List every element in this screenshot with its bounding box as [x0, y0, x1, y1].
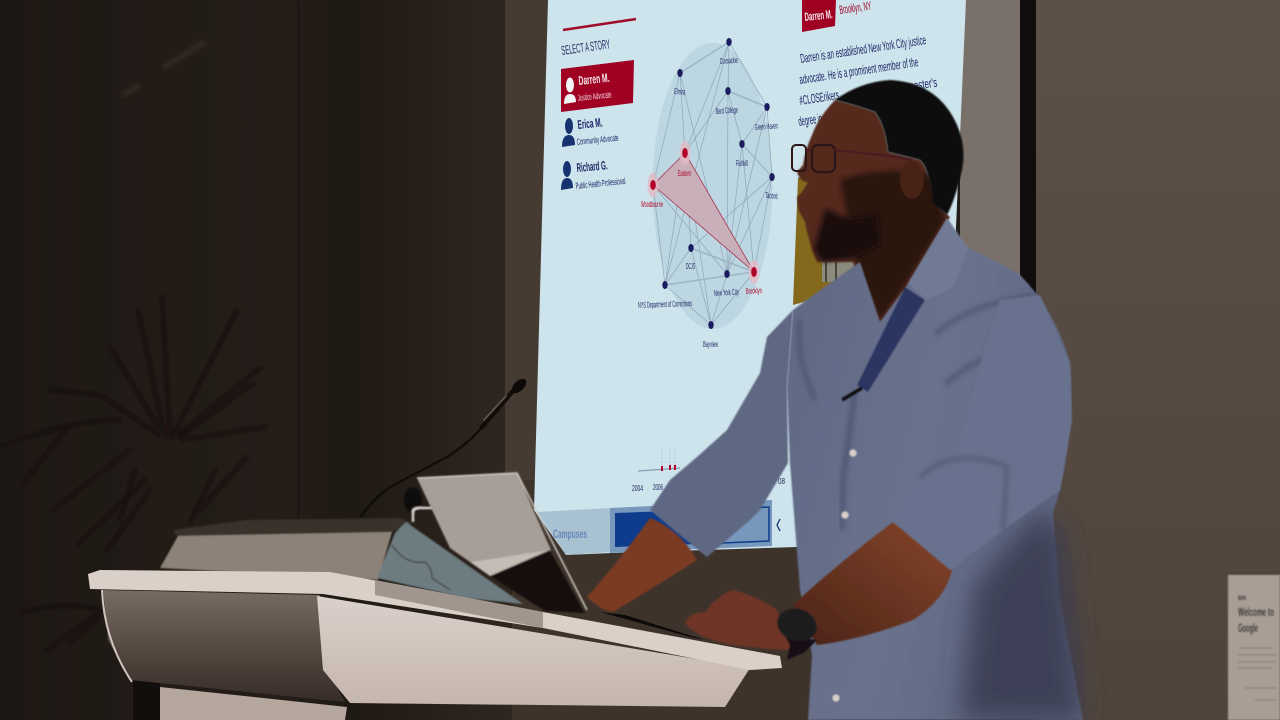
shirt placket [857, 287, 925, 392]
profile biography text [797, 32, 938, 129]
podium [88, 570, 782, 720]
profile photo [793, 165, 865, 305]
story: Darren M.: Darren M. [578, 71, 610, 88]
timeline [632, 450, 785, 493]
profile biography text: Darren is an established New York City justice [799, 32, 927, 66]
lapel microphone [842, 388, 862, 400]
timeline: 2006 [653, 482, 663, 492]
node labels: Bayview [703, 339, 718, 349]
story selector panel [560, 19, 636, 191]
podium dark side panel [103, 590, 345, 702]
node labels: DCJS [686, 261, 695, 271]
presentation screen: Green Haven [754, 120, 778, 132]
wall poster: Google [1238, 621, 1258, 635]
story: Erica M.: Community Advocate [576, 133, 619, 147]
shirt folds [799, 295, 1035, 400]
profile header: Darren M.: Darren M. [804, 7, 833, 24]
node labels: Coxsackie [719, 55, 738, 66]
ear [900, 161, 924, 199]
lower torso shadow [960, 510, 1083, 720]
bottom navigation bar: Campuses [553, 527, 587, 541]
profile biography text: advocate. He is a prominent member of the [798, 54, 919, 87]
story: Darren M. [561, 60, 634, 112]
node labels: New York City [714, 287, 739, 298]
node labels: Bard College [715, 104, 738, 116]
node labels [638, 55, 779, 349]
presentation screen: Taconic [765, 190, 779, 201]
profile biography text: degree in [797, 111, 823, 129]
face and neck [797, 100, 950, 330]
plant silhouette [0, 297, 265, 650]
presenter [587, 80, 1083, 720]
presentation screen [534, 0, 966, 555]
node labels: Brooklyn [746, 285, 762, 296]
podium white front panel [317, 596, 750, 707]
story: Erica M. [562, 115, 619, 147]
podium top edge [88, 570, 782, 670]
laptop on podium [404, 473, 587, 613]
shirt torso [787, 218, 1083, 720]
hand [685, 590, 793, 650]
face shadow [840, 171, 945, 320]
story: Darren M.: Justice Advocate [577, 89, 612, 103]
microphone [361, 376, 529, 516]
podium base [160, 687, 347, 720]
wall poster: BK [1238, 596, 1247, 602]
chevron icon [777, 519, 780, 531]
sleeve cuff fold [920, 458, 1007, 530]
monitor box on podium [160, 518, 523, 604]
node labels: NYS Department of Corrections [638, 298, 692, 310]
network diagram [638, 38, 779, 349]
timeline: 2004 [632, 483, 643, 493]
node labels: Eastern [678, 168, 691, 178]
bottom navigation bar [537, 499, 798, 555]
story: Erica M.: Erica M. [577, 115, 603, 132]
timeline: 08 [778, 476, 785, 486]
left rolled sleeve [650, 310, 793, 557]
wristwatch [773, 603, 821, 660]
collar [908, 218, 968, 300]
profile header: Darren M. [802, 0, 872, 32]
hair [835, 80, 964, 215]
left forearm [587, 518, 697, 612]
shirt buttons [832, 450, 856, 702]
tablet on podium edge [600, 612, 705, 640]
eyeglasses [792, 145, 912, 172]
node labels: Fishkill [736, 158, 748, 168]
node labels: Elmira [674, 86, 686, 97]
right rolled sleeve [893, 295, 1072, 570]
highlighted nodes [648, 141, 760, 284]
profile biography text: #CLOSErikers [798, 87, 840, 108]
story selector panel: SELECT A STORY [560, 36, 611, 58]
story selector panel: Public Health Professional [575, 176, 626, 191]
network nodes [662, 38, 775, 329]
profile biography text: master's [906, 75, 938, 94]
node labels: Woodbourne [641, 199, 663, 209]
beard [814, 208, 880, 262]
right forearm [793, 522, 952, 645]
story: Richard G.: Richard G. [576, 158, 608, 175]
story: Richard G. [561, 158, 626, 191]
wall poster [1226, 573, 1280, 720]
highlighted triangle [653, 153, 754, 272]
